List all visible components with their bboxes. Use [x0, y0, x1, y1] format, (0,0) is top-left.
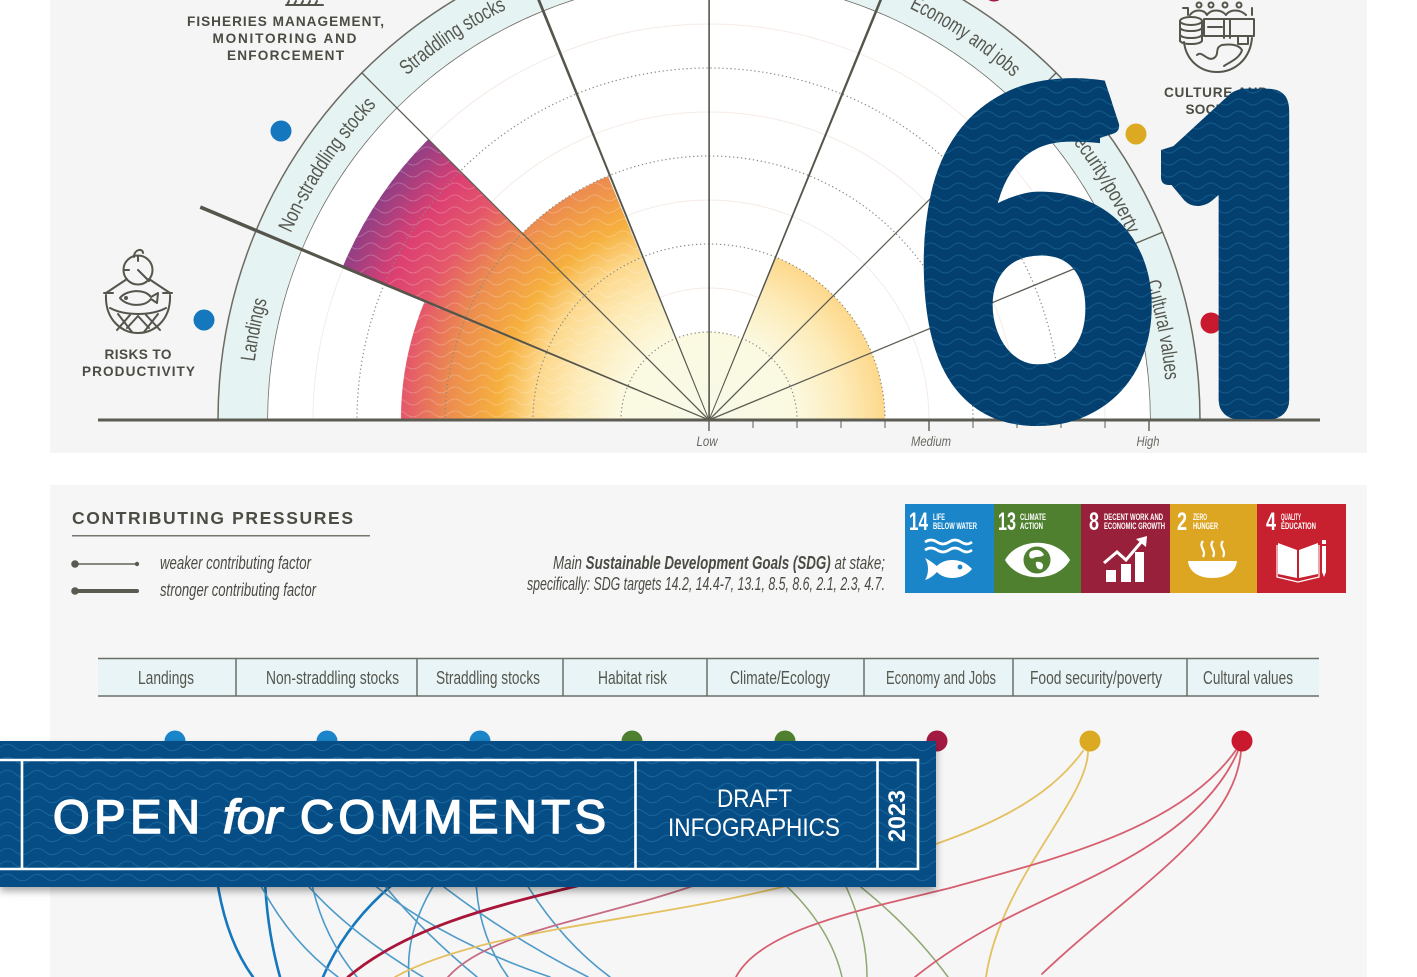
tile: SDG 8: 8: [1089, 508, 1099, 536]
big number 61: 6: [907, 56, 1163, 474]
axis labels: Medium: [911, 433, 951, 449]
caption: fisheries management: [187, 14, 384, 63]
table header: pressure categories: Habitat risk: [598, 668, 668, 688]
big number 61: [924, 78, 1290, 426]
sector spokes: [200, 0, 1163, 421]
caption: culture and society: CULTURE AND: [1164, 85, 1268, 100]
axis labels: High: [1136, 433, 1160, 449]
legend: stronger label: stronger contributing factor: [160, 580, 317, 600]
category dots row: [164, 730, 1252, 752]
heading: contributing pressures: CONTRIBUTING PRESSURES: [72, 508, 353, 528]
tile: SDG 13: 13: [998, 508, 1016, 536]
SDG tiles: [905, 504, 1346, 593]
tile: SDG 4: [1257, 504, 1346, 593]
tile: SDG 2: 2: [1177, 508, 1187, 536]
table header: pressure categories: [98, 658, 1319, 696]
table header: pressure categories: Non-straddling stocks: [266, 668, 399, 688]
risk wedges: [342, 139, 885, 420]
text: SDG note: Main Sustainable Development Goals (SDG) at stake;: [553, 553, 885, 573]
legend: weaker label: weaker contributing factor: [160, 553, 312, 573]
panel: risk chart background: [50, 0, 1367, 453]
banner title: for: [223, 790, 285, 843]
tile: SDG 4: EDUCATION: [1281, 521, 1316, 532]
table header: pressure categories: Cultural values: [1203, 668, 1293, 688]
band labels: Food security/poverty: [1075, 142, 1138, 232]
banner title: [53, 790, 606, 843]
tile: SDG 2: [1170, 504, 1257, 593]
tile: SDG 8: DECENT WORK AND: [1104, 512, 1163, 523]
legend: contributing factor: [71, 553, 317, 600]
chart inner disc: [268, 0, 1150, 420]
legend: stronger line: [71, 587, 139, 595]
tile: SDG 8: [1081, 504, 1170, 593]
tile: SDG 13: CLIMATE: [1020, 512, 1046, 523]
banner subtitle: DRAFT: [717, 785, 792, 813]
banner title: OPEN: [53, 790, 200, 843]
axis labels: Low: [696, 433, 718, 449]
tile: SDG 14: 14: [909, 508, 928, 536]
icon: culture and society: [1180, 2, 1254, 72]
caption: fisheries management: FISHERIES MANAGEMENT,: [187, 14, 384, 29]
band labels: Cultural values: [1150, 280, 1178, 380]
table header: pressure categories: Straddling stocks: [436, 668, 540, 688]
caption: fisheries management: ENFORCEMENT: [227, 48, 345, 63]
icon: fisheries management: [286, 1, 323, 5]
tile: SDG 4: 4: [1266, 508, 1276, 536]
banner: open for comments: [0, 741, 936, 887]
caption: risks to productivity: RISKS TO: [104, 347, 172, 362]
table header: pressure categories: Climate/Ecology: [730, 668, 830, 688]
panel: pressures background: [50, 485, 1367, 977]
chart outer band: [218, 0, 1200, 420]
table header: pressure categories: Landings: [138, 668, 194, 688]
table header: pressure categories: Food security/poverty: [1030, 668, 1162, 688]
band labels: [240, 0, 1178, 380]
table header: pressure categories: Economy and Jobs: [886, 668, 996, 688]
banner title: COMMENTS: [300, 790, 606, 843]
tile: SDG 13: ACTION: [1020, 521, 1043, 532]
tile: SDG 13: [994, 504, 1081, 593]
caption: risks to productivity: [82, 347, 195, 379]
banner subtitle: [668, 785, 840, 842]
icon: risks to productivity: [104, 250, 172, 333]
legend: weaker line: [71, 560, 139, 568]
tile: SDG 2: ZERO: [1193, 512, 1207, 523]
category dots on chart: [194, 0, 1222, 334]
faint grid rings: [312, 24, 1106, 418]
tile: SDG 14: LIFE: [933, 512, 945, 523]
connector curves: [217, 750, 1241, 977]
banner shadow: [0, 746, 936, 891]
axis: [98, 420, 1320, 431]
tile: SDG 2: HUNGER: [1193, 521, 1218, 532]
band labels: Landings: [240, 298, 268, 360]
caption: risks to productivity: PRODUCTIVITY: [82, 364, 195, 379]
text: SDG note: [527, 553, 885, 594]
band labels: Non-straddling stocks: [278, 99, 375, 232]
dotted grid rings: [356, 67, 1056, 418]
caption: fisheries management: MONITORING AND: [212, 31, 357, 46]
tile: SDG 4: QUALITY: [1281, 512, 1301, 523]
banner year: 2023: [884, 790, 911, 842]
tile: SDG 14: [905, 504, 994, 593]
caption: culture and society: SOCIETY: [1186, 102, 1246, 117]
banner subtitle: INFOGRAPHICS: [668, 814, 840, 842]
big number 61: 1: [1124, 70, 1366, 464]
tile: SDG 8: ECONOMIC GROWTH: [1104, 521, 1165, 532]
caption: culture and society: [1164, 85, 1268, 117]
tile: SDG 14: BELOW WATER: [933, 521, 977, 532]
axis labels: [696, 433, 1160, 449]
radial chart: [98, 0, 1320, 449]
text: SDG note: specifically: SDG targets 14.2, 14.4-7, 13.1, 8.5, 8.6, 2.1, 2.3, 4.7.: [527, 574, 885, 594]
